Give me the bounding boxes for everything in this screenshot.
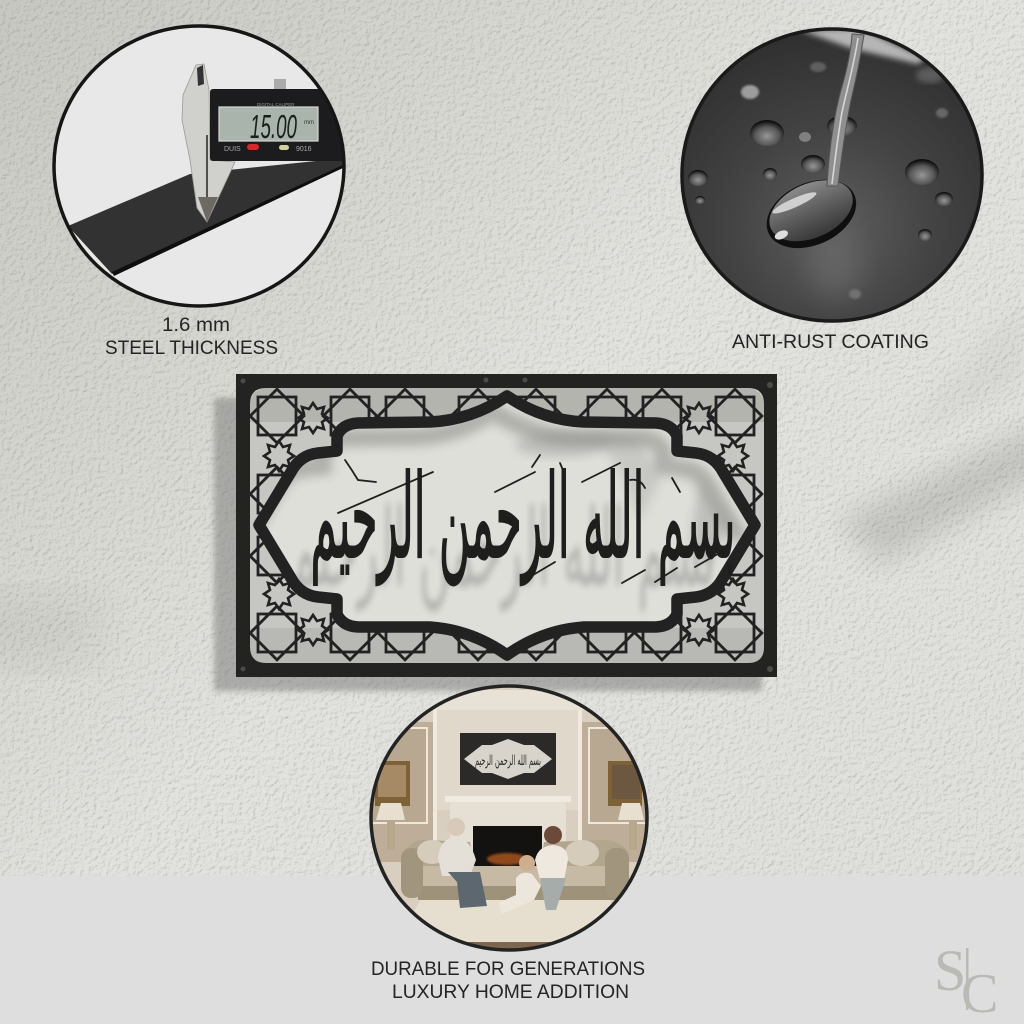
wall art in room: [460, 733, 556, 785]
caption: durable for generations: [371, 959, 645, 1003]
frame screws: [240, 378, 773, 672]
water stream: [827, 34, 864, 186]
caliper display body: mm: [304, 120, 314, 126]
caliper display body: 15.00: [250, 108, 297, 145]
family figures: [438, 818, 568, 914]
rug: [414, 900, 612, 942]
logo: SIC monogram: [934, 938, 998, 1024]
caption: steel thickness: STEEL THICKNESS: [105, 338, 278, 359]
caliper display body: DIGITAL CALIPER: [257, 102, 295, 107]
panel: steel thickness photo: [50, 20, 350, 310]
sofa: [401, 840, 629, 900]
lamps: [376, 803, 644, 850]
large water puddle: [766, 180, 856, 248]
panel: family living room photo: [365, 680, 661, 960]
caption: anti-rust coating: ANTI-RUST COATING: [732, 332, 929, 353]
logo: SIC monogram: S: [934, 938, 966, 1003]
wall art in room: بسم الله الرحمن الرحيم: [475, 753, 541, 769]
caliper display body: [210, 79, 345, 161]
floor band: [0, 876, 1024, 1024]
caption: steel thickness: [105, 315, 278, 359]
framed paintings: [375, 761, 642, 806]
logo: SIC monogram: C: [961, 963, 998, 1024]
ornate medallion panel: [259, 396, 755, 655]
caliper jaw: [182, 64, 235, 222]
frame border: [236, 374, 777, 677]
caption: durable for generations: DURABLE FOR GENERATIONS: [371, 959, 645, 980]
dark steel strip: [68, 158, 345, 274]
caliper display body: DUIS: [224, 146, 241, 153]
calligraphy flourishes: [338, 455, 730, 583]
caliper display body: 9016: [296, 146, 312, 153]
fireplace: [445, 796, 571, 868]
caption: durable for generations: LUXURY HOME ADDITION: [392, 982, 629, 1003]
panel: anti-rust water droplets photo: [675, 20, 990, 325]
lattice backing: [250, 388, 764, 663]
caption: steel thickness: 1.6 mm: [162, 315, 230, 336]
medallion outline: [259, 396, 755, 655]
medallion cast shadows: [245, 411, 741, 612]
room walls: [437, 710, 578, 810]
droplets: [688, 62, 953, 299]
panel: metal calligraphy wall art: [236, 374, 777, 677]
frame drop shadow: [214, 398, 762, 691]
